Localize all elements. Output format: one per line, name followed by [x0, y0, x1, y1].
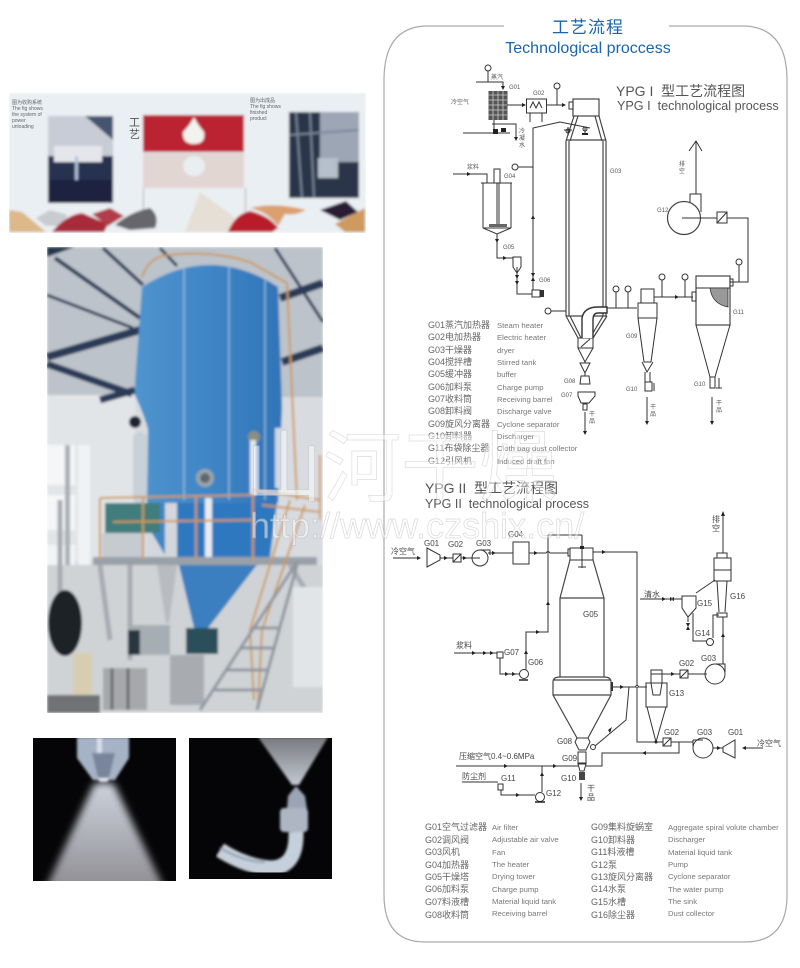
water system G14 G15: 清水 [644, 589, 660, 599]
air inlet train G01 G02 G03 G04: 冷空气 [391, 546, 415, 556]
heading: YPG II: YPG II 型工艺流程图 [425, 480, 558, 496]
photo: spray dryer tower [47, 247, 323, 713]
cooling air train G01 G02 G03 [656, 728, 781, 758]
heading: YPG I [616, 83, 779, 113]
exhaust train G02 G03 G16: G02 [679, 659, 695, 668]
drying tower G05: G05 [583, 610, 599, 619]
legend: YPG II equipment list: Pump [668, 860, 688, 869]
induced draft fan G12 [657, 141, 748, 282]
legend: YPG II equipment list: Dust collector [668, 909, 715, 918]
buffer G05 and pump G06 [495, 234, 551, 297]
discharge section G08 G09 G10: 干 [587, 784, 595, 793]
electric heater G02 [507, 83, 566, 122]
water system G14 G15: G14 [695, 629, 711, 638]
photo: banner with powders: 工 [129, 117, 140, 129]
photo: banner with powders: finished [250, 110, 267, 116]
title: 工艺流程 [552, 18, 624, 37]
legend: YPG II equipment list: Fan [492, 848, 505, 857]
feed line and atomizer [512, 122, 590, 290]
legend: YPG II equipment list: G01空气过滤器 [425, 821, 487, 832]
discharge section G08 G09 G10: G09 [562, 754, 578, 763]
diagram: YPG I process flow [451, 65, 779, 435]
legend: YPG II equipment list: G04加热器 [425, 859, 469, 870]
legend: YPG II equipment list: G14水泵 [591, 883, 626, 894]
drying tower G05 [553, 535, 613, 738]
air inlet train G01 G02 G03 G04: G02 [448, 540, 464, 549]
cyclone G09 [626, 274, 693, 425]
bag dust collector G11: 干 [716, 400, 722, 407]
steam heater G01: G01 [509, 85, 521, 91]
induced draft fan G12: G12 [657, 208, 669, 214]
legend: YPG I equipment list: G10卸料器 [428, 430, 472, 441]
legend: YPG I equipment list: Stirred tank [497, 358, 536, 367]
photo: banner with powders: 图为出成品 [250, 97, 275, 104]
stirred tank G04: G04 [504, 174, 516, 180]
cooling air train G01 G02 G03: G02 [664, 728, 680, 737]
discharge section G08 G09 G10: 品 [587, 793, 595, 802]
legend: YPG II equipment list: G16除尘器 [591, 909, 635, 920]
exhaust train G02 G03 G16: G03 [701, 654, 717, 663]
water system G14 G15 [640, 580, 719, 646]
feed system G06 G07: G07 [504, 648, 520, 657]
bag dust collector G11 [692, 276, 745, 425]
legend: YPG I equipment list: G02电加热器 [428, 331, 481, 342]
photo: banner with powders: The fig shows [12, 106, 43, 112]
compressed air and anti-dust agent G11 G12 [456, 751, 578, 802]
induced draft fan G12: 空 [679, 167, 685, 175]
legend: YPG II equipment list: G08收料筒 [425, 909, 469, 920]
legend: YPG II equipment list: G15水槽 [591, 896, 626, 907]
legend: YPG II equipment list: Aggregate spiral volute chamber [668, 823, 779, 832]
photo: banner with powders: unloading [12, 124, 34, 130]
compressed air and anti-dust agent G11 G12: 防尘剂 [462, 771, 486, 781]
legend: YPG II equipment list: Air filter [492, 823, 518, 832]
dryer G03: G03 [610, 169, 622, 175]
legend: YPG II equipment list: G11料液槽 [591, 846, 634, 857]
steam heater G01: 冷空气 [451, 98, 469, 106]
steam heater G01: 蒸汽 [491, 73, 503, 81]
legend: YPG II equipment list: Charge pump [492, 885, 539, 894]
bag dust collector G11: G10 [694, 382, 706, 388]
steam heater G01: 水 [519, 141, 525, 149]
photo: spray nozzle down [33, 737, 176, 890]
cyclone G09: 干 [650, 404, 656, 411]
legend: YPG II equipment list: Receiving barrel [492, 909, 548, 918]
compressed air and anti-dust agent G11 G12: G12 [546, 789, 562, 798]
heading: YPG II [425, 480, 589, 511]
induced draft fan G12: 排 [679, 160, 685, 168]
heading: YPG I: YPG I 型工艺流程图 [616, 83, 745, 99]
legend: YPG I equipment list: G05缓冲器 [428, 368, 472, 379]
air inlet train G01 G02 G03 G04: G01 [424, 539, 440, 548]
dryer G03: 干 [589, 411, 595, 418]
legend: YPG II equipment list: G07料液槽 [425, 896, 469, 907]
outlet piping and cyclone G13 [593, 550, 685, 746]
legend: YPG II equipment list: G06加料泵 [425, 883, 469, 894]
legend: YPG I equipment list: Discharger [497, 432, 535, 441]
stirred tank G04: 浆料 [467, 163, 479, 171]
legend: YPG I equipment list [428, 319, 578, 466]
legend: YPG II equipment list: Adjustable air valve [492, 835, 559, 844]
exhaust train G02 G03 G16 [671, 511, 746, 684]
exhaust train G02 G03 G16: 排 [712, 514, 720, 524]
steam heater G01 [451, 65, 525, 149]
watermark: 山河干燥 [245, 424, 557, 512]
legend: YPG II equipment list: Discharger [668, 835, 706, 844]
legend: YPG II equipment list: Cyclone separator [668, 872, 731, 881]
feed system G06 G07: G06 [528, 658, 544, 667]
steam heater G01: 冷 [519, 127, 525, 135]
legend: YPG II equipment list: The water pump [668, 885, 724, 894]
panel: process frame [384, 26, 787, 942]
legend: YPG II equipment list: The heater [492, 860, 530, 869]
dryer G03: 品 [589, 418, 595, 425]
bag dust collector G11: 品 [716, 407, 722, 414]
bag dust collector G11: G11 [733, 310, 745, 316]
legend: YPG II equipment list: G09集料旋蜗室 [591, 821, 653, 832]
legend: YPG II equipment list: G12泵 [591, 860, 617, 870]
legend: YPG I equipment list: G01蒸汽加热器 [428, 319, 490, 330]
air inlet train G01 G02 G03 G04: G04 [508, 530, 524, 539]
legend: YPG I equipment list: Steam heater [497, 321, 544, 330]
discharge section G08 G09 G10: G10 [561, 774, 577, 783]
watermark: http://www.czshix.cn/ [250, 505, 584, 546]
legend: YPG II equipment list: G03风机 [425, 846, 460, 857]
legend: YPG I equipment list: Cloth bag dust collector [497, 444, 578, 453]
legend: YPG I equipment list: Cyclone separator [497, 420, 560, 429]
cyclone G09: G09 [626, 334, 638, 340]
outlet piping and cyclone G13: G13 [669, 689, 685, 698]
buffer G05 and pump G06: G06 [539, 278, 551, 284]
feed system G06 G07 [454, 535, 582, 680]
legend: YPG I equipment list: dryer [497, 346, 515, 355]
dryer G03: G07 [561, 393, 573, 399]
legend: YPG I equipment list: Charge pump [497, 383, 544, 392]
watermark [245, 424, 584, 546]
title [505, 18, 671, 57]
feed system G06 G07: 浆料 [456, 640, 472, 650]
photo: banner with powders: 图为收购系统 [12, 99, 42, 106]
water system G14 G15: G15 [697, 599, 713, 608]
steam heater G01: 凝 [519, 134, 525, 142]
legend: YPG I equipment list: Receiving barrel [497, 395, 553, 404]
legend: YPG I equipment list: Induced draft fan [497, 457, 555, 466]
legend: YPG II equipment list: G02调风阀 [425, 835, 469, 845]
title: Technological proccess [505, 40, 671, 57]
legend: YPG I equipment list: G08卸料阀 [428, 405, 472, 416]
photo: banner with powders: product [250, 116, 267, 122]
legend: YPG I equipment list: G03干燥器 [428, 345, 472, 355]
legend: YPG II equipment list: Material liquid tank [492, 897, 556, 906]
legend: YPG II equipment list: Drying tower [492, 872, 536, 881]
legend: YPG II equipment list: G10卸料器 [591, 834, 635, 845]
legend: YPG I equipment list: G12引风机 [428, 455, 472, 466]
legend: YPG I equipment list: G04搅拌槽 [428, 356, 472, 367]
compressed air and anti-dust agent G11 G12: 压缩空气0.4~0.6MPa [459, 751, 535, 761]
heading: YPG I: YPG I technological process [617, 99, 779, 113]
legend: YPG II equipment list: The sink [668, 897, 697, 906]
air inlet train G01 G02 G03 G04 [391, 530, 568, 567]
legend: YPG I equipment list: G06加料泵 [428, 381, 472, 392]
photo: banner with powders: 艺 [129, 128, 140, 141]
legend: YPG I equipment list: G11布袋除尘器 [428, 442, 489, 453]
legend: YPG I equipment list: G09旋风分离器 [428, 418, 490, 429]
exhaust train G02 G03 G16: 空 [712, 523, 720, 533]
stirred tank G04 [453, 163, 516, 234]
cooling air train G01 G02 G03: G01 [728, 728, 744, 737]
dryer G03: G08 [564, 379, 576, 385]
legend: YPG I equipment list: Discharge valve [497, 407, 552, 416]
heading: YPG II: YPG II technological process [425, 497, 589, 511]
cyclone G09: G10 [626, 387, 638, 393]
photo: banner with powders: power [12, 118, 26, 124]
dryer G03 [545, 99, 637, 435]
compressed air and anti-dust agent G11 G12: G11 [501, 774, 516, 783]
discharge section G08 G09 G10 [557, 737, 679, 802]
legend: YPG I equipment list: buffer [497, 370, 517, 379]
legend: YPG II equipment list [425, 821, 779, 920]
discharge section G08 G09 G10: G08 [557, 737, 573, 746]
photo: banner with powders: the system of [12, 112, 42, 118]
buffer G05 and pump G06: G05 [503, 245, 515, 251]
legend: YPG II equipment list: G05干燥塔 [425, 871, 469, 882]
diagram: YPG II process flow [391, 480, 781, 802]
air inlet train G01 G02 G03 G04: G03 [476, 539, 492, 548]
legend: YPG II equipment list: Material liquid tank [668, 848, 732, 857]
photo: banner with powders: The fig shows [250, 104, 281, 110]
photo: banner with powders [9, 93, 366, 233]
photo: spray nozzle up [189, 737, 332, 879]
cyclone G09: 品 [650, 411, 656, 418]
electric heater G02: G02 [533, 91, 545, 97]
legend: YPG I equipment list: Electric heater [497, 333, 547, 342]
cooling air train G01 G02 G03: 冷空气 [757, 738, 781, 748]
legend: YPG II equipment list: G13旋风分离器 [591, 871, 653, 882]
cooling air train G01 G02 G03: G03 [697, 728, 713, 737]
legend: YPG I equipment list: G07收料筒 [428, 393, 472, 404]
exhaust train G02 G03 G16: G16 [730, 592, 746, 601]
